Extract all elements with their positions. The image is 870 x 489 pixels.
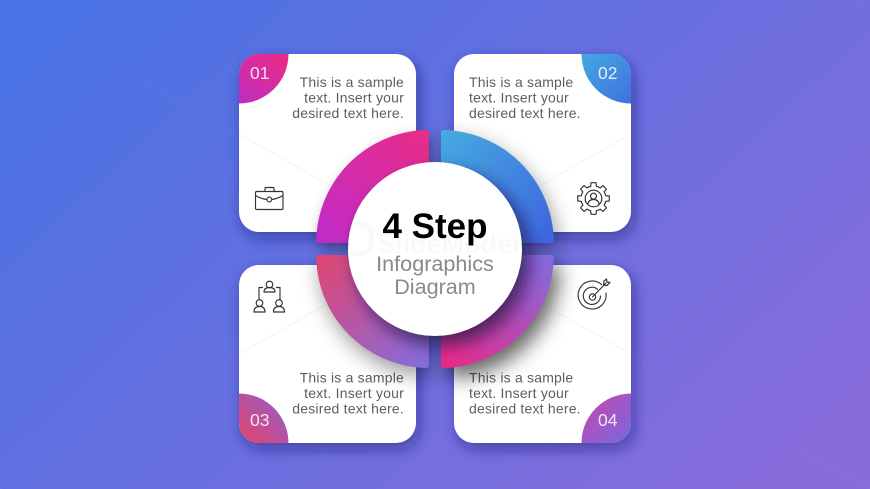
number 04: 04 <box>598 410 618 430</box>
ring segment: top right <box>441 130 557 251</box>
text block 04: text. Insert your <box>469 385 569 401</box>
corner badge 02 <box>582 54 631 104</box>
text block 01: This is a sample <box>300 74 404 90</box>
icon: target with arrow <box>578 279 610 309</box>
center circle <box>348 162 529 345</box>
ring segment: top left <box>316 130 432 249</box>
text block 01: text. Insert your <box>304 90 404 106</box>
icon: briefcase <box>256 188 283 210</box>
number 03: 03 <box>250 410 269 430</box>
ring segment: bottom right <box>441 255 560 378</box>
watermark <box>350 222 520 259</box>
text block 03: This is a sample <box>300 370 404 386</box>
watermark: SlideModel <box>377 229 520 259</box>
icon: gear with person <box>578 183 609 214</box>
icon: hierarchy of people <box>254 281 284 312</box>
panel: step 04 card <box>450 264 642 456</box>
text block 04: desired text here. <box>469 400 581 416</box>
text block 03: text. Insert your <box>304 385 404 401</box>
corner badge 01 <box>239 54 288 104</box>
subtitle: Infographics <box>376 251 494 276</box>
corner badge 03 <box>239 394 288 443</box>
panel: step 02 card <box>450 53 641 245</box>
text block 02: desired text here. <box>469 105 581 121</box>
ring segment: bottom left <box>316 255 432 376</box>
subtitle: Diagram <box>394 274 476 299</box>
panel: step 01 card <box>235 53 426 245</box>
text block 03: desired text here. <box>292 400 404 416</box>
panel: step 03 card <box>235 264 426 456</box>
number 02: 02 <box>598 63 617 83</box>
text block 04: This is a sample <box>469 370 573 386</box>
title: 4 Step: 4 Step <box>382 207 488 246</box>
text block 01: desired text here. <box>292 105 404 121</box>
text block 02: This is a sample <box>469 74 573 90</box>
corner badge 04 <box>582 394 631 443</box>
text block 02: text. Insert your <box>469 90 569 106</box>
number 01: 01 <box>250 63 269 83</box>
